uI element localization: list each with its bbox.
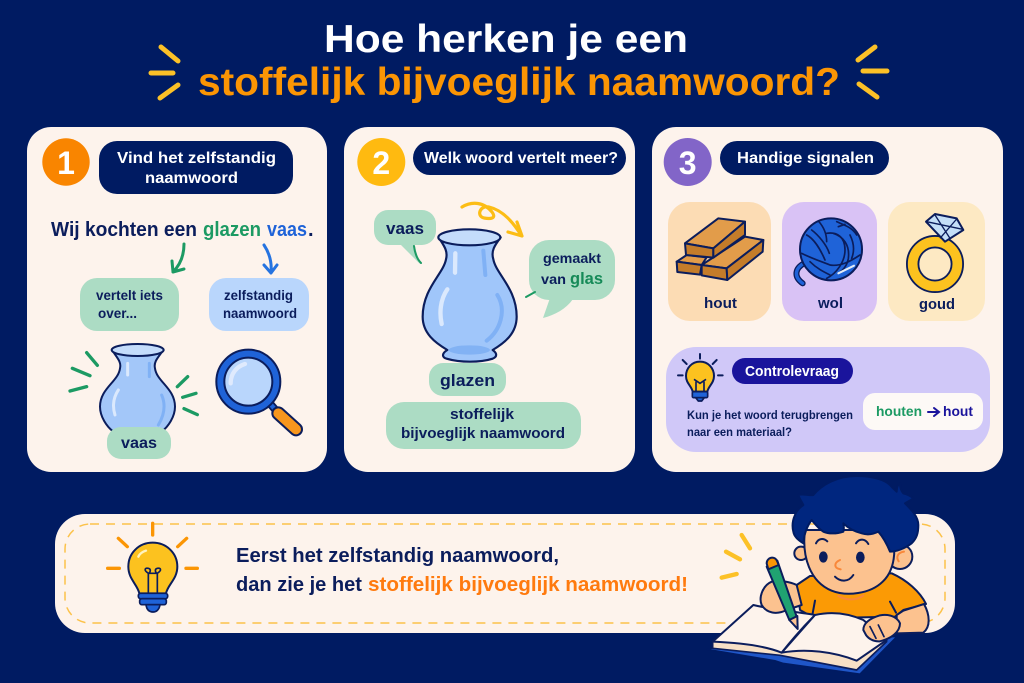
title rays left: [151, 47, 178, 98]
speech bubble: gemaakt van glas: glas: [570, 269, 603, 288]
rays beside pencil: [722, 535, 750, 578]
label: controlevraag: [732, 358, 853, 384]
callout: controlevraag: [666, 347, 990, 452]
speech bubble: vaas: vaas: [386, 219, 424, 238]
icon: small bulb: [678, 354, 723, 401]
icon: wood planks: [677, 218, 763, 280]
label: glazen: [429, 363, 506, 396]
label: vertelt iets over: vertelt iets: [96, 288, 163, 303]
ears: [794, 547, 808, 560]
label: stoffelijk bijvoeglijk naamwoord: [386, 402, 581, 449]
right hand: [863, 615, 900, 641]
icon: light bulb: [108, 523, 197, 612]
arrow: green: [172, 244, 184, 272]
illustration: boy writing in book: [707, 476, 929, 674]
facial features: [819, 551, 828, 563]
tile: wol: [782, 202, 877, 321]
badge 1: 1: [57, 145, 75, 181]
sentence: vaas: [267, 219, 307, 241]
heading 1: naamwoord: [145, 170, 238, 187]
right arm: [897, 604, 929, 633]
icon: magnifier: [216, 350, 296, 429]
label: vertelt iets over: [80, 278, 179, 331]
label: controlevraag: Controlevraag: [745, 364, 839, 380]
speech bubble: vaas: [374, 210, 436, 264]
hair: [793, 476, 918, 552]
sentence: [51, 219, 314, 241]
label: stoffelijk bijvoeglijk naamwoord: stoffelijk: [450, 406, 515, 423]
speech bubble: gemaakt van glas: van: [541, 271, 566, 287]
badge 1: [42, 138, 90, 186]
icon: yarn ball: [796, 218, 862, 283]
speech bubble: gemaakt van glas: [526, 240, 615, 318]
label: zelfstandig naamwoord: zelfstandig: [224, 288, 293, 303]
panel: bottom tip banner: [55, 514, 955, 633]
icon: large vase: [423, 229, 517, 362]
arrow: curly yellow: [462, 203, 522, 236]
label: glazen: glazen: [440, 371, 495, 390]
label: vertelt iets over: over...: [98, 306, 137, 321]
heading 3: [720, 141, 889, 175]
heading 1: [99, 141, 293, 194]
tip text: Eerst het zelfstandig naamwoord,: [236, 545, 559, 567]
heading 2: Welk woord vertelt meer?: [424, 150, 618, 167]
panel: step 2: [344, 127, 635, 472]
heading 3: Handige signalen: [737, 150, 874, 167]
tip text: dan zie je het: [236, 574, 362, 596]
open book: [707, 637, 897, 674]
speech bubble: gemaakt van glas: gemaakt: [543, 250, 601, 266]
title: [198, 18, 840, 104]
pencil: [767, 561, 797, 620]
panel: step 1: [27, 127, 327, 472]
badge 2: [357, 138, 405, 186]
heading 1: Vind het zelfstandig: [117, 150, 276, 167]
shirt: [797, 573, 926, 618]
question text: [687, 408, 853, 439]
title: Hoe herken je een: [324, 18, 688, 61]
sentence: glazen: [203, 219, 261, 241]
tile: hout: [668, 202, 771, 321]
label: vaas: [107, 427, 171, 459]
sentence: .: [308, 219, 314, 241]
tile: wol: wol: [817, 295, 843, 312]
example: houten to hout: houten: [876, 403, 922, 419]
tip text: [236, 545, 688, 596]
badge 3: 3: [679, 145, 697, 181]
left hand: [761, 581, 802, 613]
title rays right: [858, 47, 887, 97]
tile: hout: hout: [704, 295, 737, 312]
badge 2: 2: [372, 145, 390, 181]
sentence: Wij kochten een: [51, 219, 197, 241]
arrow: blue: [264, 245, 277, 273]
example: houten to hout: hout: [943, 403, 973, 419]
example: houten to hout: [863, 393, 983, 430]
label: zelfstandig naamwoord: [209, 278, 309, 331]
heading 2: [413, 141, 626, 175]
panel: step 3: [55, 127, 1003, 674]
label: stoffelijk bijvoeglijk naamwoord: bijvoeglijk naamwoord: [401, 425, 565, 442]
title: stoffelijk bijvoeglijk naamwoord?: [198, 61, 840, 104]
label: vaas: vaas: [121, 435, 157, 452]
label: zelfstandig naamwoord: naamwoord: [223, 306, 297, 321]
icon: gold ring: [913, 214, 963, 286]
face: [804, 530, 894, 594]
question text: Kun je het woord terugbrengen: [687, 408, 853, 422]
badge 3: [664, 138, 712, 186]
tile: goud: [888, 202, 985, 321]
tile: goud: goud: [919, 296, 955, 313]
icon: vase with rays: [70, 344, 197, 432]
tip text: stoffelijk bijvoeglijk naamwoord!: [368, 574, 688, 596]
question text: naar een materiaal?: [687, 425, 792, 439]
